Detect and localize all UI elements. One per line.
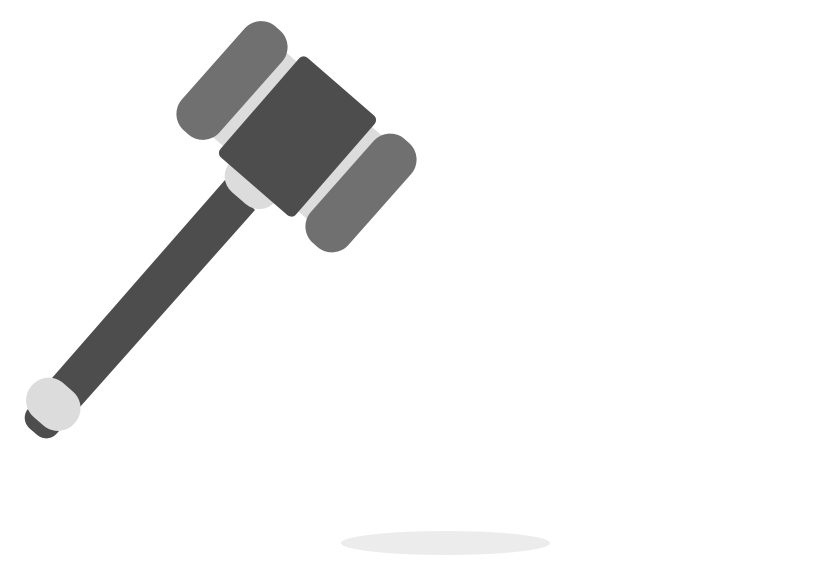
gavel handle (19, 180, 255, 444)
gavel head (167, 12, 426, 261)
right cap (296, 125, 426, 261)
handle end collar (17, 369, 90, 440)
left cap (167, 12, 297, 149)
head block (216, 54, 379, 219)
head neck collar (216, 144, 291, 218)
handle butt end (19, 372, 89, 444)
shadow ellipse (341, 531, 550, 555)
light band (206, 47, 389, 226)
